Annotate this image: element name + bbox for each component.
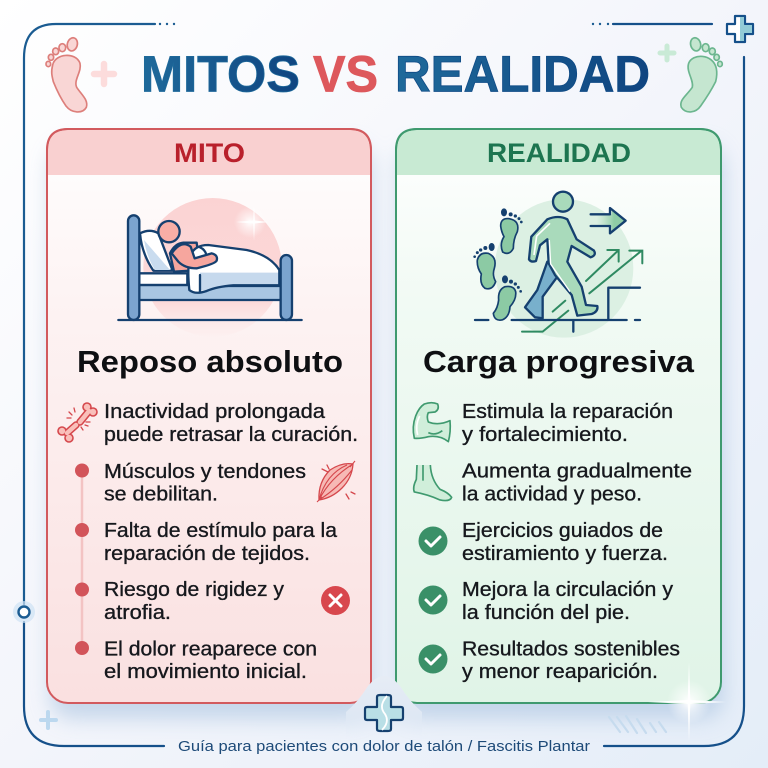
text block: mito points: El dolor reaparece con <box>104 638 317 660</box>
icon: left red footprint <box>46 37 87 112</box>
text block: realidad points: Aumenta gradualmente <box>462 460 692 482</box>
panel shadows <box>50 145 724 719</box>
title: VS <box>313 46 378 102</box>
icon: pink plus <box>94 64 114 84</box>
icon: ring on frame <box>13 601 35 623</box>
text block: mito points: atrofia. <box>104 601 171 624</box>
icon: flexed arm <box>413 403 450 442</box>
icon: muscle pain marks <box>322 465 355 499</box>
timeline: bullets <box>75 464 89 655</box>
title <box>141 46 650 102</box>
panel: mito <box>47 129 371 703</box>
icon: green plus <box>660 46 674 60</box>
icon: bottom medical cross <box>365 695 403 731</box>
heading: carga progresiva: Carga progresiva <box>423 345 695 379</box>
illustration: person in bed <box>118 198 302 337</box>
text block: mito points: Riesgo de rigidez y <box>104 578 285 601</box>
text block: realidad points: Mejora la circulación y <box>462 578 674 601</box>
text block: realidad points: estiramiento y fuerza. <box>462 542 668 565</box>
decoration: hatch lines <box>609 716 666 733</box>
text block: realidad points: la función del pie. <box>462 601 630 624</box>
text block: mito points: Músculos y tendones <box>104 460 306 483</box>
header label: mito: MITO <box>174 138 245 168</box>
icon: muscle <box>317 461 355 502</box>
icon: bottom left plus <box>41 712 56 728</box>
heading: reposo absoluto: Reposo absoluto <box>77 345 343 379</box>
text block: realidad points: la actividad y peso. <box>462 482 642 506</box>
text block: realidad points: y menor reaparición. <box>462 660 658 683</box>
text block: mito points: se debilitan. <box>104 482 218 506</box>
sparkle: bed <box>234 203 268 241</box>
icon: foot <box>414 465 452 501</box>
icon: broken bone <box>57 402 98 443</box>
icons: check marks <box>418 526 448 674</box>
panel: realidad <box>396 129 721 703</box>
text block: realidad points: Resultados sostenibles <box>462 638 680 660</box>
text block: mito points: Inactividad prolongada <box>104 400 326 423</box>
text block: mito points: puede retrasar la curación. <box>104 423 358 446</box>
text block: realidad points: Ejercicios guiados de <box>462 519 663 542</box>
title: MITOS <box>141 46 300 102</box>
icon: x mark <box>321 586 350 615</box>
notch behind bottom cross <box>346 676 422 738</box>
text block: realidad points <box>462 400 692 683</box>
illustration: walking person <box>473 192 642 338</box>
text block: mito points: el movimiento inicial. <box>104 660 307 683</box>
panel header: mito <box>48 130 370 175</box>
header label: realidad: REALIDAD <box>487 138 631 168</box>
text block: realidad points: y fortalecimiento. <box>462 423 628 446</box>
title: REALIDAD <box>395 46 650 102</box>
text block: mito points: Falta de estímulo para la <box>104 519 338 542</box>
text block: realidad points: Estimula la reparación <box>462 400 673 423</box>
icon: right green footprint <box>681 37 722 112</box>
icon: top right medical cross <box>727 16 753 42</box>
text block: mito points <box>104 400 358 683</box>
sparkle: bottom right <box>648 662 726 742</box>
footer caption: Guía para pacientes con dolor de talón / Fascitis Plantar <box>178 739 590 755</box>
text block: mito points: reparación de tejidos. <box>104 542 310 565</box>
panel header: realidad <box>397 130 720 175</box>
